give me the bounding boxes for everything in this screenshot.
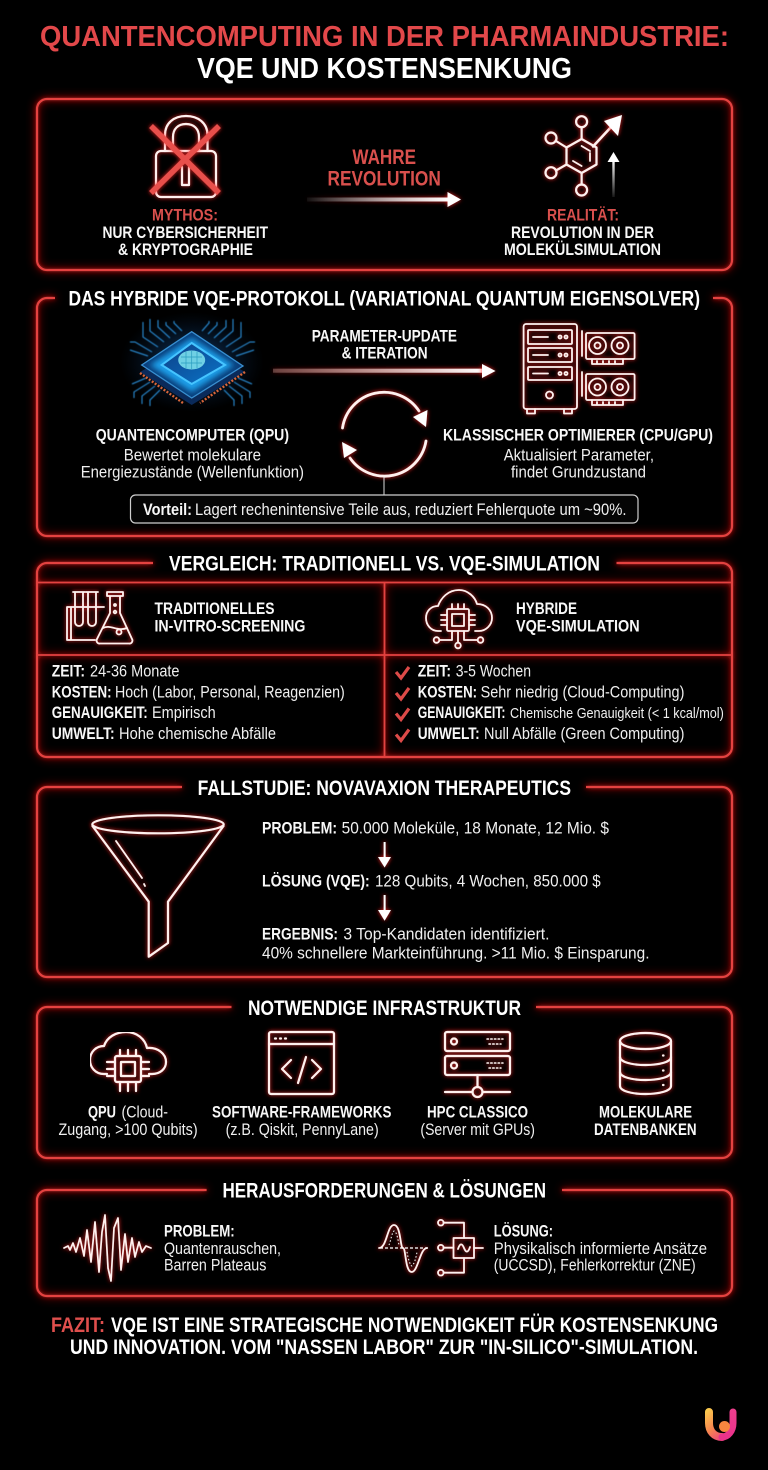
- text: QPU: QPU: [88, 1104, 116, 1122]
- text: software frameworks: (z.B. Qiskit, PennyLane): [226, 1121, 379, 1139]
- arrow: down 1: [378, 842, 391, 868]
- arrow: down 2: [378, 895, 391, 921]
- text: classical optimizer: Aktualisiert Parameter,: [504, 447, 654, 465]
- text: traditional heading: IN-VITRO-SCREENING: [154, 618, 305, 636]
- text: classical optimizer: [443, 427, 713, 482]
- list: VQE with check marks: GENAUIGKEIT:: [418, 704, 506, 722]
- icon: crossed-out lock: [151, 116, 219, 197]
- text: traditional heading: TRADITIONELLES: [154, 600, 274, 618]
- text: HPC: HPC CLASSICO: [427, 1104, 528, 1122]
- panel: hybrid VQE protocol: [37, 287, 732, 536]
- text: result: ERGEBNIS:: [262, 925, 338, 943]
- heading: VERGLEICH: TRADITIONELL VS. VQE-SIMULATION: [169, 552, 600, 576]
- text: classical optimizer: findet Grundzustand: [511, 464, 646, 482]
- icon: sine wave and filter block: [379, 1220, 483, 1275]
- panel: required infrastructure: [37, 996, 732, 1158]
- heading: FALLSTUDIE: NOVAVAXION THERAPEUTICS: [198, 776, 571, 800]
- list: VQE with check marks: UMWELT:: [418, 725, 480, 743]
- text: solution: (UCCSD), Fehlerkorrektur (ZNE): [494, 1257, 696, 1275]
- icon: server with GPUs: [524, 324, 635, 414]
- text: myth: & KRYPTOGRAPHIE: [118, 241, 253, 259]
- list: traditional: 24-36 Monate: [90, 663, 180, 681]
- callout: advantage: Vorteil:: [143, 501, 192, 519]
- list: VQE with check marks: Null Abfälle (Green Computing): [484, 725, 684, 743]
- arrow: myth to reality: [307, 192, 461, 207]
- icon: iteration cycle: [342, 392, 428, 495]
- heading: HERAUSFORDERUNGEN & LÖSUNGEN: [222, 1177, 546, 1202]
- title: VQE UND KOSTENSENKUNG: [197, 53, 572, 85]
- text: problem: Quantenrauschen,: [164, 1240, 281, 1258]
- text: reality: [504, 207, 661, 259]
- transition label: WAHRE: [352, 146, 416, 169]
- conclusion: [51, 1312, 718, 1359]
- text: molecular databases: [594, 1104, 697, 1139]
- text: solution: LÖSUNG (VQE):: [262, 872, 370, 891]
- text: QPU: Energiezustände (Wellenfunktion): [81, 464, 304, 482]
- icon: cloud QPU: [90, 1032, 166, 1091]
- icon: code window: [269, 1032, 334, 1094]
- icon: funnel: [92, 815, 224, 957]
- text: solution: LÖSUNG:: [494, 1222, 553, 1241]
- text: solution: [262, 872, 601, 891]
- text: myth: MYTHOS:: [152, 207, 218, 225]
- icon: noise waveform: [64, 1215, 151, 1281]
- list: traditional: Hohe chemische Abfälle: [119, 725, 276, 743]
- text: solution: Physikalisch informierte Ansätze: [494, 1240, 707, 1258]
- list: traditional: ZEIT:: [52, 663, 85, 681]
- text: VQE heading: VQE-SIMULATION: [516, 618, 640, 636]
- text: result: 40% schnellere Markteinführung. >11 Mio. $ Einsparung.: [262, 944, 650, 962]
- logo: [709, 1412, 733, 1437]
- text: HPC: (Server mit GPUs): [420, 1121, 535, 1139]
- text: reality: REVOLUTION IN DER: [511, 224, 654, 242]
- callout: advantage: Lagert rechenintensive Teile aus, reduziert Fehlerquote um ~90%.: [195, 501, 626, 519]
- panel: challenges and solutions: [37, 1177, 732, 1296]
- text: molecular databases: MOLEKULARE: [599, 1104, 692, 1122]
- list: traditional: [52, 663, 345, 743]
- text: myth: NUR CYBERSICHERHEIT: [102, 224, 268, 242]
- text: solution: [494, 1222, 707, 1275]
- text: problem: [164, 1223, 281, 1275]
- icon: cloud chip with nodes: [426, 590, 492, 648]
- text: VQE heading: [516, 600, 640, 636]
- text: result: 3 Top-Kandidaten identifiziert.: [343, 925, 550, 943]
- text: QPU: Zugang, >100 Qubits): [58, 1121, 198, 1139]
- text: result: [262, 925, 650, 962]
- callout: advantage: [130, 495, 638, 523]
- text: solution: 128 Qubits, 4 Wochen, 850.000 $: [375, 873, 601, 891]
- text: QPU: [81, 427, 304, 482]
- list: traditional: Empirisch: [152, 704, 216, 722]
- text: reality: MOLEKÜLSIMULATION: [504, 240, 661, 259]
- title: QUANTENCOMPUTING IN DER PHARMAINDUSTRIE:: [40, 21, 729, 53]
- text: QPU: Bewertet molekulare: [124, 447, 261, 465]
- text: reality: REALITÄT:: [547, 207, 619, 225]
- text: myth: [102, 207, 268, 259]
- icon: database: [620, 1033, 671, 1094]
- icon: molecule with rising arrow: [546, 115, 622, 197]
- title: [40, 21, 729, 85]
- text: software frameworks: SOFTWARE-FRAMEWORKS: [212, 1104, 391, 1122]
- icon: HPC server: [445, 1032, 510, 1097]
- list: traditional: UMWELT:: [52, 725, 115, 743]
- arrow: parameter update: [273, 328, 496, 378]
- list: VQE with check marks: ZEIT:: [418, 663, 451, 681]
- text: VQE heading: HYBRIDE: [516, 600, 577, 618]
- heading: NOTWENDIGE INFRASTRUKTUR: [248, 996, 521, 1020]
- text: problem: Barren Plateaus: [164, 1257, 266, 1275]
- text: QPU: (Cloud-: [122, 1104, 168, 1122]
- list: VQE with check marks: KOSTEN:: [418, 684, 477, 702]
- icon: quantum chip: [120, 312, 264, 412]
- list: VQE with check marks: Sehr niedrig (Cloud-Computing): [481, 684, 684, 702]
- arrow: parameter update: & ITERATION: [342, 345, 428, 363]
- arrow: parameter update: PARAMETER-UPDATE: [312, 328, 457, 346]
- text: classical optimizer: KLASSISCHER OPTIMIERER (CPU/GPU): [443, 427, 713, 445]
- transition label: [328, 146, 441, 191]
- list: VQE with check marks: [396, 663, 724, 743]
- list: VQE with check marks: Chemische Genauigkeit (< 1 kcal/mol): [510, 705, 724, 722]
- list: traditional: Hoch (Labor, Personal, Reagenzien): [115, 684, 345, 702]
- text: QPU: QUANTENCOMPUTER (QPU): [96, 427, 289, 445]
- text: problem: PROBLEM:: [164, 1223, 235, 1241]
- transition label: REVOLUTION: [328, 168, 441, 191]
- text: software frameworks: [212, 1104, 391, 1139]
- panel: case study: [37, 776, 732, 977]
- list: VQE with check marks: 3-5 Wochen: [456, 663, 531, 681]
- text: QPU: [58, 1104, 198, 1139]
- icon: test tubes and flask: [67, 592, 132, 644]
- list: traditional: KOSTEN:: [52, 684, 112, 702]
- text: molecular databases: DATENBANKEN: [594, 1121, 697, 1139]
- conclusion: FAZIT:: [51, 1313, 105, 1337]
- text: traditional heading: [154, 600, 305, 636]
- list: traditional: GENAUIGKEIT:: [52, 704, 148, 722]
- text: problem: 50.000 Moleküle, 18 Monate, 12 Mio. $: [342, 819, 609, 837]
- text: problem: PROBLEM:: [262, 819, 337, 837]
- panel: mythos vs reality: [37, 99, 732, 270]
- text: HPC: [420, 1104, 535, 1139]
- panel: comparison table: [37, 552, 732, 757]
